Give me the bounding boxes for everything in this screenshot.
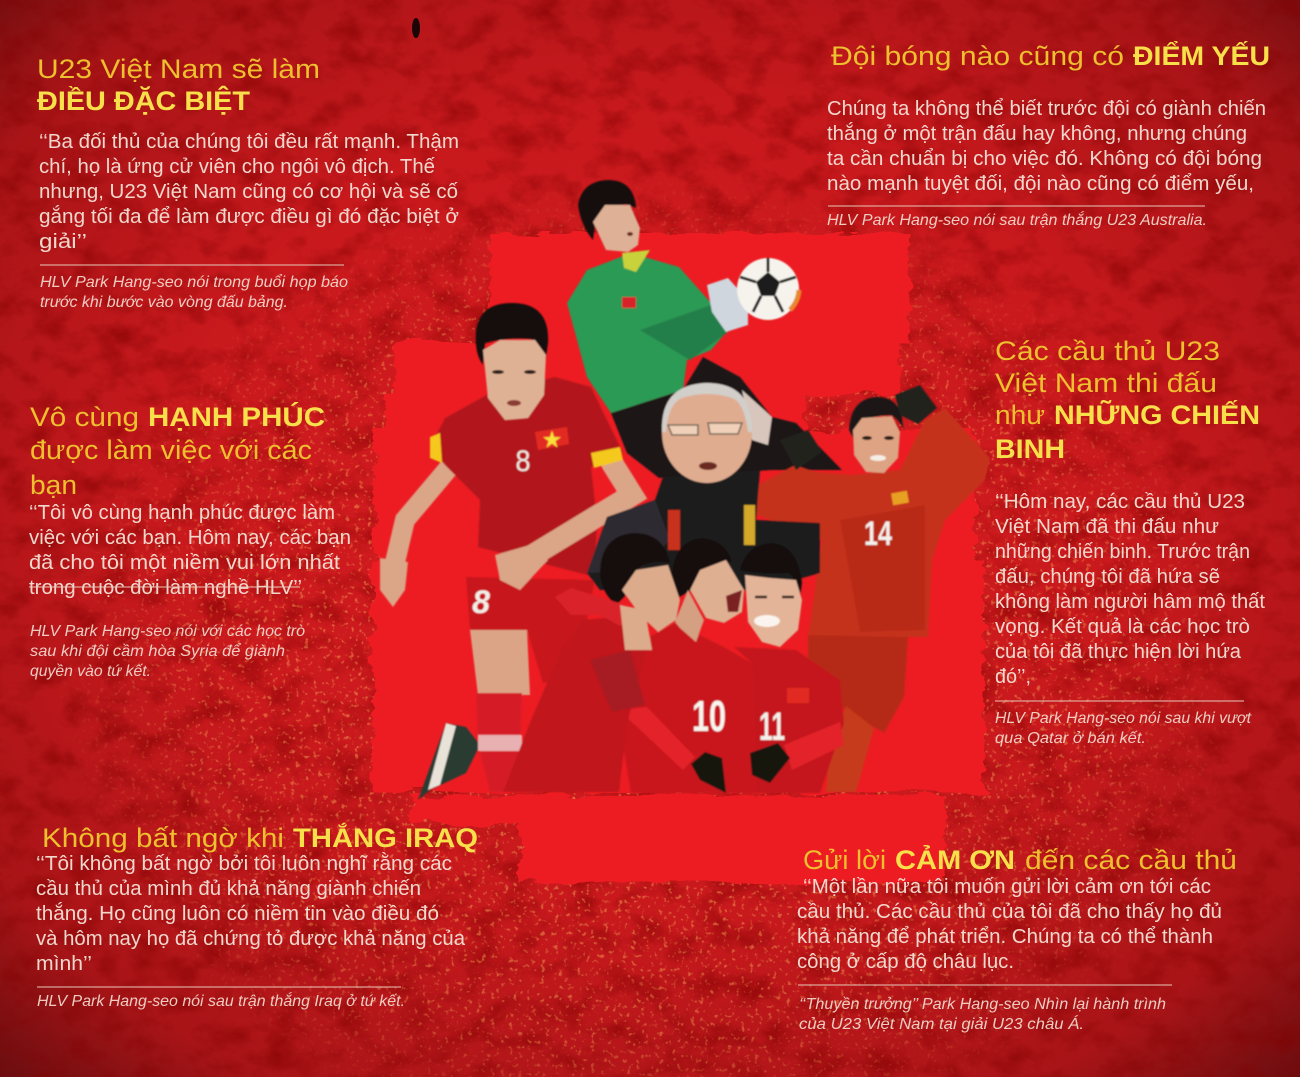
quote: ‘‘Tôi vô cùng hạnh phúc được làm <box>29 502 335 524</box>
quote <box>39 131 459 253</box>
panel: Vô cùng hạnh phúc <box>29 401 351 680</box>
heading: Việt Nam thi đấu <box>995 368 1217 398</box>
quote: Chúng ta không thể biết trước đội có giành chiến <box>827 98 1266 120</box>
quote: giải’’ <box>39 231 87 253</box>
caption <box>799 996 1166 1033</box>
quote: thắng. Họ cũng luôn có niềm tin vào điều đó <box>36 902 439 925</box>
quote: ‘‘Ba đối thủ của chúng tôi đều rất mạnh. Thậm <box>39 131 459 153</box>
heading: đến các cầu thủ <box>1025 845 1237 875</box>
heading: ĐIỀU ĐẶC BIỆT <box>37 85 251 116</box>
icon: football <box>737 258 799 320</box>
heading: CẢM ƠN <box>895 843 1015 875</box>
player: number 14 <box>745 385 990 792</box>
player: number 11: 11 <box>759 705 785 749</box>
quote: đấu, chúng tôi đã hứa sẽ <box>995 566 1220 588</box>
heading <box>831 40 1270 71</box>
heading: như <box>995 400 1045 430</box>
quote <box>29 502 351 599</box>
panel: U23 Việt Nam sẽ làm điều đặc biệt <box>37 54 459 311</box>
quote: mình’’ <box>36 953 92 975</box>
gloves <box>691 743 790 793</box>
caption <box>995 710 1252 747</box>
quote <box>36 852 466 975</box>
quote: ‘‘Một lần nữa tôi muốn gửi lời cảm ơn tới các <box>803 876 1211 898</box>
caption: HLV Park Hang-seo nói sau trận thắng U23 Australia. <box>827 210 1207 229</box>
caption <box>30 623 305 680</box>
caption: HLV Park Hang-seo nói trong buổi họp báo <box>40 273 348 291</box>
player: number 8: 8 <box>516 445 530 478</box>
quote: nhưng, U23 Việt Nam cũng có cơ hội và sẽ cố <box>39 181 458 203</box>
quote: của tôi đã thực hiện lời hứa <box>995 641 1242 663</box>
quote: thắng ở một trận đấu hay không, nhưng chúng <box>827 122 1247 145</box>
quote <box>995 491 1265 688</box>
coach: Park Hang-seo <box>587 383 820 590</box>
heading: được làm việc với các <box>30 435 312 465</box>
heading: U23 Việt Nam sẽ làm <box>37 54 320 84</box>
players: celebrating trio <box>503 533 844 793</box>
quote <box>797 876 1222 973</box>
caption: qua Qatar ở bán kết. <box>995 730 1146 747</box>
quote: ‘‘Hôm nay, các cầu thủ U23 <box>995 491 1245 513</box>
panel: Các cầu thủ thi đấu như những chiến binh <box>995 336 1265 747</box>
heading <box>803 843 1237 875</box>
player: number 10: 10 <box>692 692 726 741</box>
heading: HẠNH PHÚC <box>148 401 325 432</box>
caption: quyền vào tứ kết. <box>30 663 151 680</box>
quote: cầu thủ. Các cầu thủ của tôi đã cho thấy họ đủ <box>797 901 1222 923</box>
player: number 10 <box>619 538 756 793</box>
panel: Gửi lời cảm ơn đến các cầu thủ <box>797 843 1237 1033</box>
heading: Các cầu thủ U23 <box>995 336 1220 366</box>
caption: ‘‘Thuyền trưởng’’ Park Hang-seo Nhìn lại hành trình <box>799 996 1166 1013</box>
quote: và hôm nay họ đã chứng tỏ được khả năng của <box>36 928 466 950</box>
central red brush strokes <box>372 233 984 882</box>
caption: HLV Park Hang-seo nói sau khi vượt <box>995 710 1252 727</box>
heading <box>30 401 325 500</box>
quote: những chiến binh. Trước trận <box>995 541 1250 563</box>
player: goalkeeper <box>567 180 842 478</box>
icon: Vietnam flag: ★ <box>542 430 562 451</box>
caption: trước khi bước vào vòng đấu bảng. <box>40 294 288 311</box>
panel: Đội bóng nào cũng có điểm yếu <box>827 40 1270 229</box>
heading: BINH <box>995 434 1065 464</box>
player: number 8 <box>380 303 632 800</box>
quote: gắng tối đa để làm được điều gì đó đặc biệt ở <box>39 205 459 228</box>
heading: Không bất ngờ khi <box>42 823 284 853</box>
number on shirt: 14 <box>864 515 892 553</box>
player: left teammate <box>503 533 680 792</box>
heading: ĐIỂM YẾU <box>1133 40 1270 71</box>
panel: Không bất ngờ khi thắng Iraq <box>36 822 478 1010</box>
heading: Đội bóng nào cũng có <box>831 41 1124 71</box>
quote: ta cần chuẩn bị cho việc đó. Không có đội bóng <box>827 148 1262 170</box>
heading: Gửi lời <box>803 845 886 875</box>
quote: chí, họ là ứng cử viên cho ngôi vô địch. Thế <box>39 156 435 178</box>
quote: khả năng để phát triển. Chúng ta có thể thành <box>797 926 1213 948</box>
quote: đã cho tôi một niềm vui lớn nhất <box>29 552 340 574</box>
player: number 11 <box>734 543 844 793</box>
quote: đó’’, <box>995 666 1031 688</box>
quote: trong cuộc đời làm nghề HLV’’ <box>29 577 302 599</box>
quote: không làm người hâm mộ thất <box>995 591 1265 613</box>
icon: Vietnam flag <box>535 427 569 451</box>
heading <box>42 822 478 853</box>
caption: sau khi đội cầm hòa Syria để giành <box>30 642 285 660</box>
heading <box>37 54 320 116</box>
heading: bạn <box>30 470 77 500</box>
quote: vọng. Kết quả là các học trò <box>995 616 1250 638</box>
quote: nào mạnh tuyệt đối, đội nào cũng có điểm yếu, <box>827 173 1254 195</box>
quote: cầu thủ của mình đủ khả năng giành chiến <box>36 878 421 900</box>
player: number 8: 8 <box>472 584 490 620</box>
photo collage: Park Hang-seo and players <box>380 180 990 800</box>
caption: của U23 Việt Nam tại giải U23 châu Á. <box>799 1014 1084 1033</box>
heading: Vô cùng <box>30 402 139 432</box>
heading <box>995 336 1260 464</box>
heading: NHỮNG CHIẾN <box>1054 399 1260 430</box>
caption: HLV Park Hang-seo nói sau trận thắng Iraq ở tứ kết. <box>37 991 405 1010</box>
heading: THẮNG IRAQ <box>293 822 478 853</box>
quote <box>827 98 1266 195</box>
caption <box>40 273 348 311</box>
quote: ‘‘Tôi không bất ngờ bởi tôi luôn nghĩ rằng các <box>36 852 452 875</box>
quote: công ở cấp độ châu lục. <box>797 951 1014 973</box>
quote: Việt Nam đã thi đấu như <box>995 516 1219 538</box>
quote: việc với các bạn. Hôm nay, các bạn <box>29 527 351 549</box>
caption: HLV Park Hang-seo nói với các học trò <box>30 623 305 640</box>
